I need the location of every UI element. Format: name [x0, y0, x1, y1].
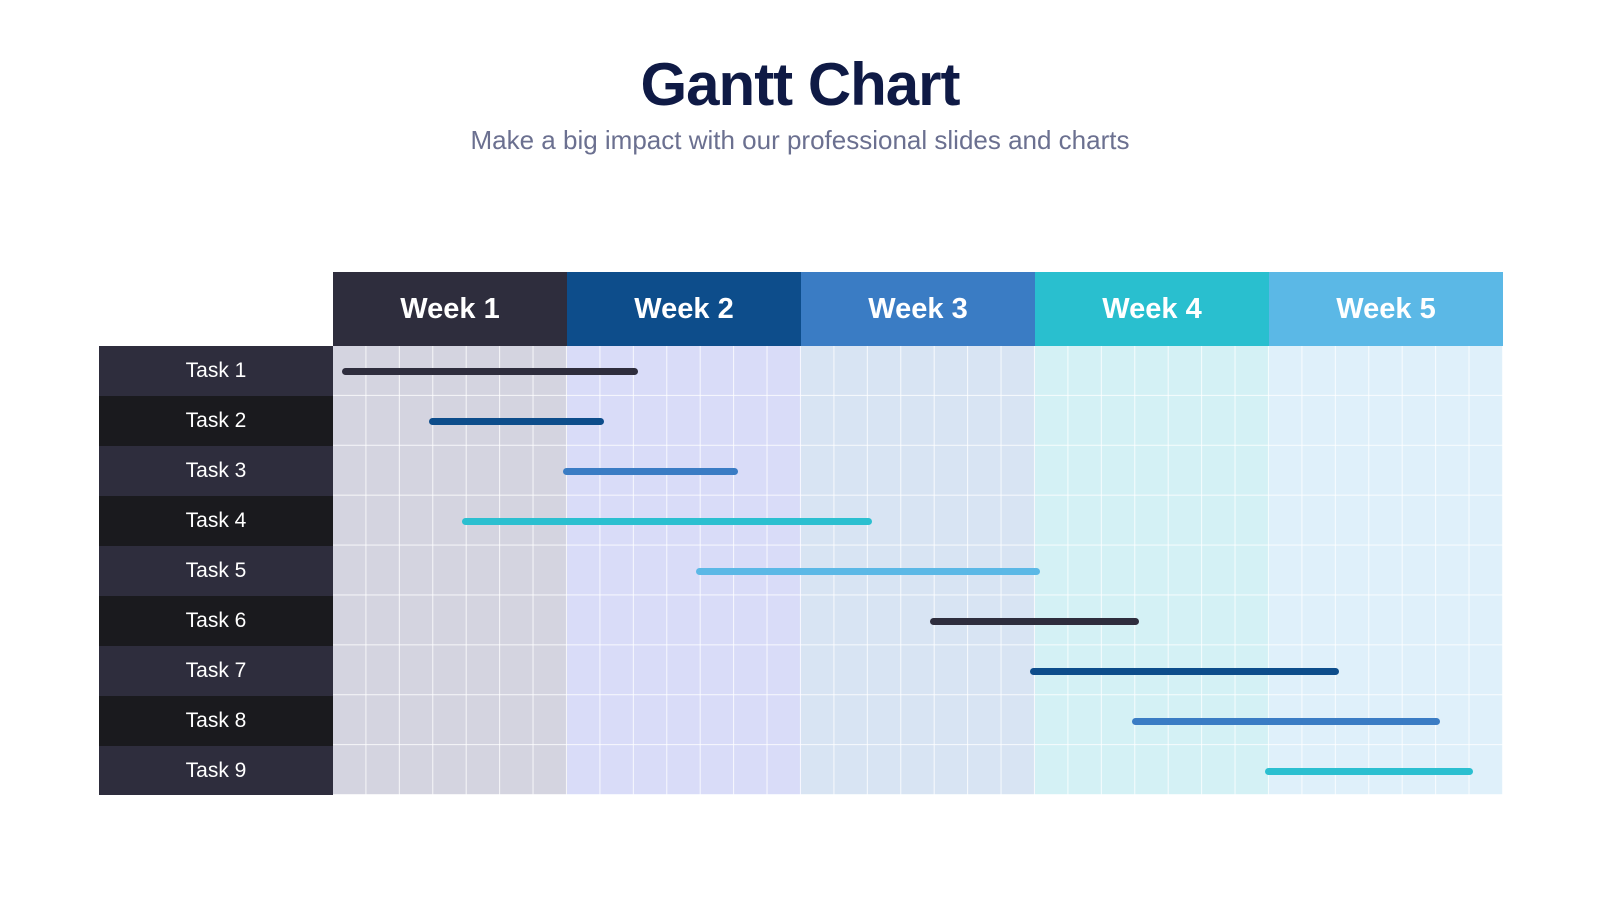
task labels: Task 5	[186, 559, 246, 582]
subtitle: Make a big impact with our professional slides and charts	[470, 125, 1130, 155]
header: Week 3	[801, 272, 1035, 346]
header: Week 5	[1269, 272, 1503, 346]
header: Week 2: Week 2	[634, 292, 734, 324]
task labels: Task 2	[186, 409, 246, 432]
header: Week 1: Week 1	[400, 292, 500, 324]
week columns background	[333, 346, 1503, 795]
task labels: Task 4	[186, 509, 246, 532]
header: Week 1	[333, 272, 567, 346]
task bars	[342, 368, 1473, 775]
task labels: Task 1	[186, 359, 246, 382]
title: Gantt Chart	[640, 51, 960, 118]
header: Week 3: Week 3	[868, 292, 968, 324]
task labels: Task 7	[186, 659, 246, 682]
task labels: Task 6	[186, 609, 246, 632]
header: Week 2	[567, 272, 801, 346]
task labels: Task 8	[186, 709, 246, 732]
header: Week 4	[1035, 272, 1269, 346]
task labels	[99, 346, 333, 795]
task labels: Task 9	[186, 758, 246, 782]
task labels: Task 3	[186, 459, 246, 482]
header: Week 4: Week 4	[1102, 292, 1202, 324]
header: Week 5: Week 5	[1336, 292, 1436, 324]
